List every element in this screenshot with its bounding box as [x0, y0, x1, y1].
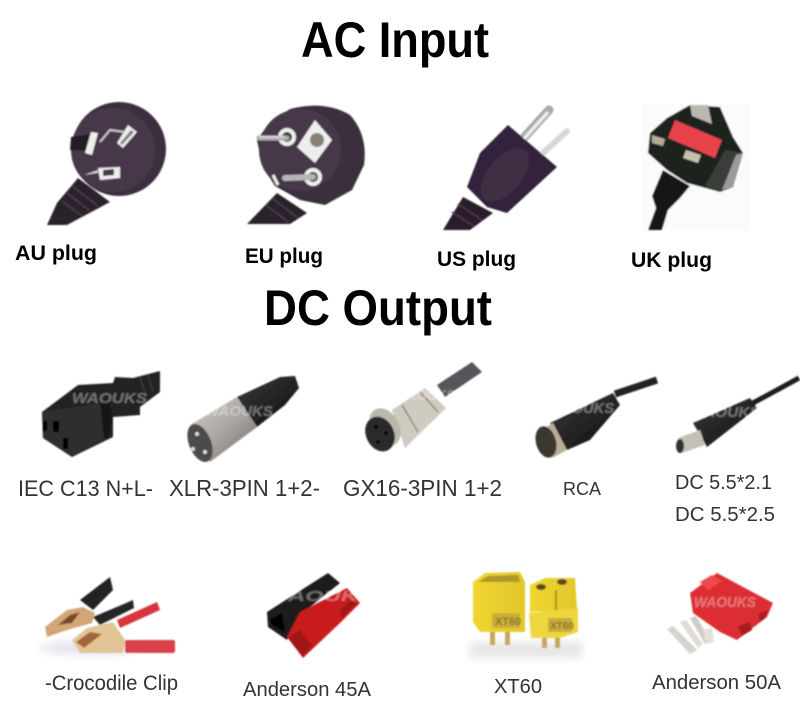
icon: RCA connector — [532, 380, 657, 460]
label: XLR-3PIN 1+2-: XLR-3PIN 1+2- — [169, 475, 320, 501]
icon: XT60 connectors — [470, 572, 582, 658]
icon: DC barrel connector: WAOUKS — [690, 404, 760, 421]
label: DC 5.5*2.5: DC 5.5*2.5 — [675, 504, 775, 526]
label: IEC C13 N+L-: IEC C13 N+L- — [18, 476, 153, 501]
label: XT60: XT60 — [494, 676, 542, 698]
icon: RCA connector: WAOUKS — [548, 400, 614, 417]
label: RCA: RCA — [563, 478, 602, 499]
label: Anderson 50A: Anderson 50A — [652, 671, 781, 694]
label: US plug: US plug — [437, 248, 516, 271]
label: EU plug: EU plug — [245, 245, 323, 268]
icon: Anderson 45A connector: AOUK — [286, 588, 360, 605]
icon: AU plug — [47, 102, 166, 225]
label: Anderson 45A: Anderson 45A — [243, 678, 371, 701]
icon: XT60 connectors: XT60 — [550, 621, 574, 632]
icon: US plug — [443, 110, 567, 230]
icon: XLR 3-pin connector: WAOUKS — [205, 403, 273, 420]
icon: Anderson 50A connector: WAOUKS — [694, 594, 756, 611]
label: GX16-3PIN 1+2: GX16-3PIN 1+2 — [343, 475, 502, 501]
title: AC Input: AC Input — [301, 12, 489, 68]
icon: GX16 3-pin connector — [360, 362, 482, 456]
icon: crocodile clips — [40, 577, 175, 655]
icon: Anderson 50A connector — [667, 573, 773, 654]
title: DC Output: DC Output — [264, 280, 492, 336]
icon: IEC C13 connector: WAOUKS — [72, 390, 147, 407]
icon: UK plug — [642, 104, 750, 230]
label: DC 5.5*2.1: DC 5.5*2.1 — [675, 472, 772, 494]
label: UK plug: UK plug — [631, 249, 712, 272]
label: -Crocodile Clip: -Crocodile Clip — [45, 672, 178, 695]
label: AU plug: AU plug — [15, 242, 97, 265]
icon: EU plug — [247, 106, 365, 224]
icon: XT60 connectors: XT60 — [495, 616, 521, 628]
icon: GX16 3-pin connector: WAOUKS — [395, 387, 455, 404]
icon: DC barrel connector — [676, 378, 799, 453]
icon: XLR 3-pin connector — [182, 376, 299, 466]
icon: Anderson 45A connector — [267, 573, 360, 658]
icon: IEC C13 connector — [42, 371, 160, 457]
